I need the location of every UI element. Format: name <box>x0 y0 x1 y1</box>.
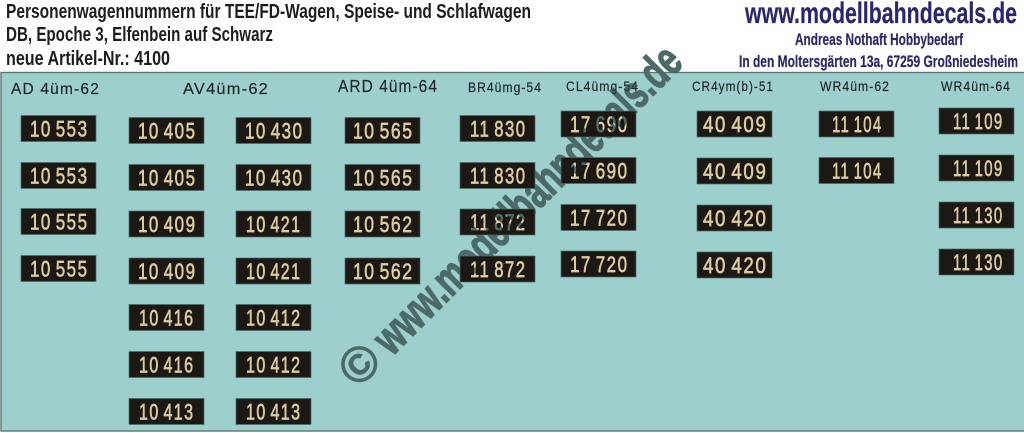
plates: CL4ümg-54 <box>561 111 636 277</box>
plates: CR4ym(b)-51: 40 409 <box>703 112 768 137</box>
plates: AD 4üm-62 <box>21 116 96 282</box>
heading: vendor address <box>739 0 1018 71</box>
plates: ARD 4üm-64: 10 565 <box>353 118 414 144</box>
watermark <box>327 34 692 397</box>
plates: CR4ym(b)-51: 40 420 <box>703 206 768 231</box>
plates: CR4ym(b)-51: 40 420 <box>703 253 768 278</box>
plates: AD 4üm-62: 10 555 <box>30 210 88 234</box>
plates: CR4ym(b)-51: 40 409 <box>703 159 768 184</box>
column labels <box>11 76 1011 98</box>
watermark: © <box>327 331 392 397</box>
plates: CL4ümg-54: 17 720 <box>570 206 628 230</box>
column labels: CR4ym(b)-51 <box>692 78 774 94</box>
plates: ARD 4üm-64: 10 562 <box>353 212 414 237</box>
plates: AV4üm-62 left column: 10 405 <box>138 166 196 190</box>
plates: AV4üm-62 right column: 10 413 <box>246 400 302 424</box>
plates: ARD 4üm-64 <box>345 118 420 284</box>
plates: WR4üm-62 <box>819 111 894 184</box>
plates: BR4ümg-54: 11 830 <box>470 164 526 188</box>
column labels: ARD 4üm-64 <box>338 76 438 96</box>
plates: WR4üm-62: 11 104 <box>832 112 882 137</box>
plates: AV4üm-62 left column: 10 413 <box>139 400 194 424</box>
plates: AD 4üm-62: 10 553 <box>30 164 88 188</box>
plates: CL4ümg-54: 17 720 <box>570 252 628 277</box>
plates: BR4ümg-54 <box>460 116 535 282</box>
column labels: CL4ümg-54 <box>566 78 639 94</box>
plates: AV4üm-62 left column: 10 416 <box>139 352 194 378</box>
plates: AV4üm-62 left column: 10 405 <box>138 118 196 144</box>
heading: product title: neue Artikel-Nr.: 4100 <box>6 48 170 70</box>
plates: AV4üm-62 right column: 10 421 <box>246 212 302 237</box>
plates: AD 4üm-62: 10 555 <box>30 256 88 282</box>
plates: ARD 4üm-64: 10 565 <box>353 166 414 190</box>
plates: AV4üm-62 left column: 10 409 <box>138 259 196 284</box>
column labels: WR4üm-62 <box>820 78 890 94</box>
plates: WR4üm-64 <box>939 108 1014 275</box>
plates: AD 4üm-62: 10 553 <box>30 116 88 142</box>
plates: AV4üm-62 right column: 10 430 <box>245 118 304 144</box>
column labels: AV4üm-62 <box>183 81 269 98</box>
plates: AV4üm-62 left column: 10 416 <box>139 306 194 330</box>
plates: AV4üm-62 right column: 10 421 <box>246 259 302 284</box>
plates: AV4üm-62 right column: 10 412 <box>246 352 302 378</box>
plates: CL4ümg-54: 17 690 <box>570 158 628 184</box>
plates: ARD 4üm-64: 10 562 <box>353 259 414 284</box>
heading: product title <box>6 1 531 70</box>
plates: BR4ümg-54: 11 830 <box>470 116 526 142</box>
column labels: BR4ümg-54 <box>468 79 542 95</box>
heading: product title: DB, Epoche 3, Elfenbein auf Schwarz <box>6 24 273 46</box>
plates: AV4üm-62 right column: 10 430 <box>245 166 304 190</box>
plates: CL4ümg-54: 17 690 <box>570 112 628 137</box>
plates: AV4üm-62 left column <box>129 118 204 424</box>
column labels: AD 4üm-62 <box>11 81 100 98</box>
plates: AV4üm-62 right column: 10 412 <box>246 306 302 330</box>
heading: product title: Personenwagennummern für TEE/FD-Wagen, Speise- und Schlafwagen <box>6 1 531 23</box>
plates: AV4üm-62 left column: 10 409 <box>138 212 196 237</box>
plates: WR4üm-62: 11 104 <box>832 158 882 184</box>
plates: BR4ümg-54: 11 872 <box>470 210 526 235</box>
plates: AV4üm-62 right column <box>236 118 311 424</box>
plates: CR4ym(b)-51 <box>697 111 772 278</box>
plates: BR4ümg-54: 11 872 <box>470 257 526 282</box>
column labels: WR4üm-64 <box>941 78 1011 94</box>
